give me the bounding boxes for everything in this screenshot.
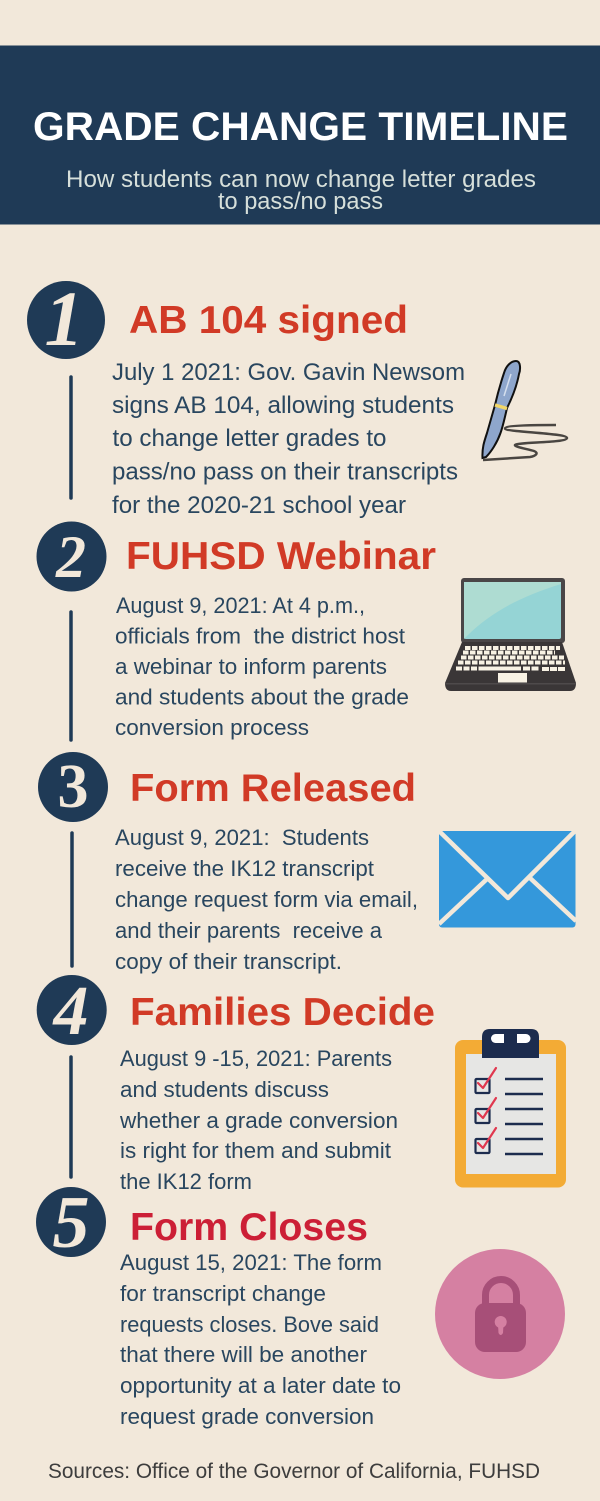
body text 2: a webinar to inform parents <box>115 654 387 679</box>
step 4: Families Decide <box>37 973 566 1194</box>
number badge 4: 4 <box>52 973 88 1050</box>
body text 5: that there will be another <box>120 1342 367 1367</box>
body text 5: for transcript change <box>120 1281 326 1306</box>
timeline connector 4 <box>69 1057 73 1177</box>
header banner <box>0 46 600 224</box>
number badge 1 <box>27 275 105 362</box>
body text 1: to change letter grades to <box>112 425 386 452</box>
body text 2: August 9, 2021: At 4 p.m., <box>116 593 365 618</box>
body text 2: and students about the grade <box>115 684 409 710</box>
number badge 3: 3 <box>58 753 88 821</box>
body text 5: August 15, 2021: The form <box>120 1250 382 1275</box>
body text 3: change request form via email, <box>115 887 418 912</box>
number badge 5: 5 <box>52 1182 90 1264</box>
body text 4: is right for them and submit <box>120 1138 391 1163</box>
subtitle: How students can now change letter grades <box>66 166 536 193</box>
body text 1: signs AB 104, allowing students <box>112 392 454 419</box>
body text 1 <box>112 359 465 519</box>
body text 3 <box>115 825 418 974</box>
body text 3: receive the IK12 transcript <box>115 856 374 881</box>
heading 3: Form Released <box>130 767 416 810</box>
number badge 1: 1 <box>44 275 84 362</box>
title: GRADE CHANGE TIMELINE <box>33 105 568 149</box>
heading 2: FUHSD Webinar <box>126 535 436 578</box>
body text 5: opportunity at a later date to <box>120 1373 401 1398</box>
icon: envelope <box>439 831 576 928</box>
body text 4: whether a grade conversion <box>119 1108 398 1133</box>
number badge 2: 2 <box>55 524 86 590</box>
step 3: Form Released <box>38 752 576 974</box>
body text 2 <box>115 593 409 740</box>
body text 5 <box>120 1250 401 1429</box>
icon: padlock <box>435 1249 565 1379</box>
body text 3: and their parents receive a <box>115 918 383 943</box>
number badge 5 <box>36 1182 106 1264</box>
body text 4: August 9 -15, 2021: Parents <box>120 1046 392 1071</box>
body text 1: pass/no pass on their transcripts <box>112 458 458 486</box>
timeline connector 2 <box>69 612 73 740</box>
step 5: Form Closes <box>36 1182 565 1429</box>
timeline connector 3 <box>70 833 74 966</box>
step 1: AB 104 signed <box>27 275 567 519</box>
body text 4: and students discuss <box>120 1077 329 1102</box>
subtitle <box>66 166 536 215</box>
body text 4 <box>119 1046 398 1194</box>
body text 3: August 9, 2021: Students <box>115 825 369 850</box>
number badge 4 <box>37 973 107 1050</box>
body text 2: officials from the district host <box>115 624 405 648</box>
timeline connector 1 <box>69 377 73 498</box>
body text 1: for the 2020-21 school year <box>112 492 406 519</box>
body text 3: copy of their transcript. <box>115 949 342 974</box>
body text 2: conversion process <box>115 715 309 740</box>
number badge 2 <box>36 522 106 592</box>
body text 5: requests closes. Bove said <box>120 1312 379 1337</box>
heading 1: AB 104 signed <box>129 299 408 342</box>
body text 1: July 1 2021: Gov. Gavin Newsom <box>112 359 465 386</box>
heading 4: Families Decide <box>130 991 435 1034</box>
icon: laptop <box>445 578 576 691</box>
number badge 3 <box>38 752 108 822</box>
icon: checklist clipboard <box>455 1029 566 1188</box>
body text 4: the IK12 form <box>120 1169 252 1194</box>
subtitle: to pass/no pass <box>218 188 383 215</box>
sources line: Sources: Office of the Governor of California, FUHSD <box>48 1460 540 1483</box>
heading 5: Form Closes <box>130 1206 368 1249</box>
step 2: FUHSD Webinar <box>36 522 576 740</box>
body text 5: request grade conversion <box>120 1404 374 1429</box>
icon: pen signing <box>482 361 567 460</box>
